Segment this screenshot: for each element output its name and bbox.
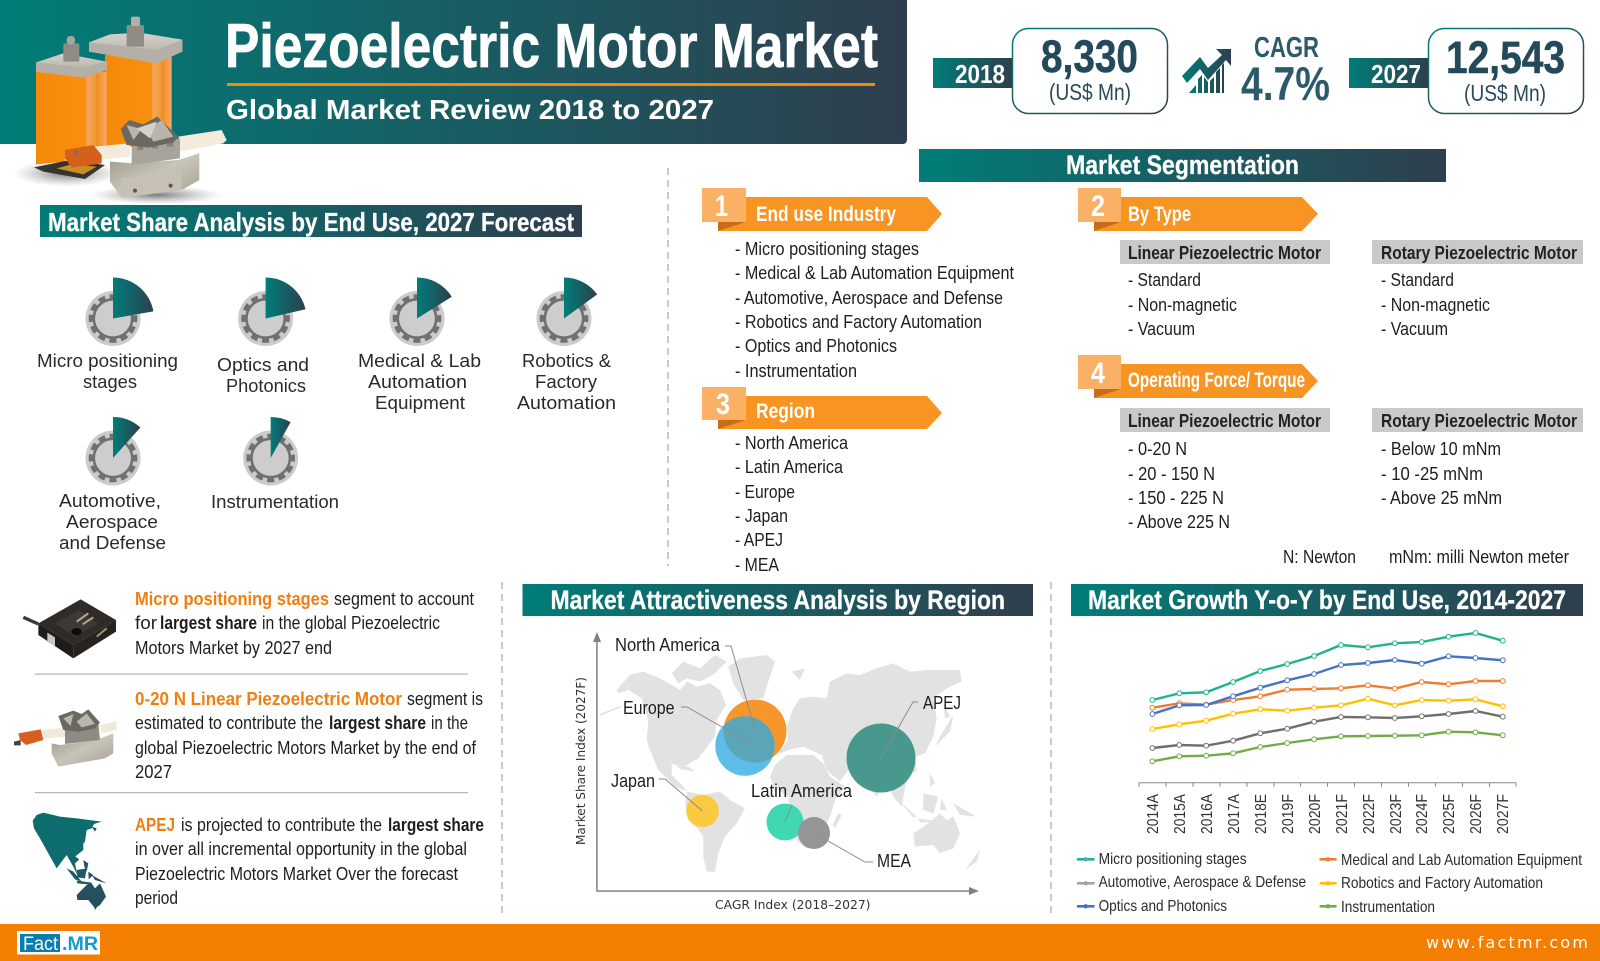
gear: optics and photonics: Photonics	[226, 376, 306, 396]
segment 2: by type: By Type	[1128, 203, 1191, 226]
series: instrumentation	[1150, 729, 1505, 764]
x axis labels: 2021F	[1334, 794, 1351, 834]
list: regions: - Europe	[735, 482, 795, 502]
segment 4: operating force and torque: Operating Force/ Torque	[1128, 369, 1305, 392]
takeaway: micro positioning: largest share	[160, 613, 257, 633]
gear: micro positioning stages	[37, 278, 178, 392]
gear: automotive aerospace and defense: Automotive,	[59, 491, 161, 511]
image: linear piezoelectric motor	[14, 709, 117, 767]
stat: 2027 market value: 2027	[1371, 59, 1421, 89]
gear: robotics and factory automation: Automation	[517, 393, 616, 413]
takeaway: APEJ: largest share	[388, 815, 484, 835]
takeaway: linear motor: 0-20 N Linear Piezoelectric Motor	[135, 689, 402, 709]
column: rotary motor types: - Vacuum	[1381, 319, 1448, 339]
line chart: growth by end use	[1077, 631, 1582, 916]
takeaway: APEJ: Piezoelectric Motors Market Over the forecast	[135, 864, 458, 884]
x axis labels: 2017A	[1226, 794, 1243, 834]
column: linear motor types: - Vacuum	[1128, 319, 1195, 339]
segment 1: end use industry	[702, 188, 1014, 381]
segment 3: region	[702, 387, 942, 575]
legend: Instrumentation	[1341, 899, 1435, 916]
list: end use industries: - Automotive, Aerospace and Defense	[735, 288, 1003, 308]
gear: optics and photonics: Optics and	[217, 355, 309, 375]
stat: 2027 market value: (US$ Mn)	[1464, 80, 1546, 106]
column: rotary motor torque	[1372, 408, 1583, 508]
bubble labels: North America	[615, 635, 721, 655]
bubble labels: APEJ	[923, 693, 961, 713]
segment 1: end use industry: 1	[715, 190, 728, 223]
note: units: mNm: milli Newton meter	[1389, 547, 1569, 567]
list: end use industries: - Robotics and Factory Automation	[735, 312, 982, 332]
series: automotive aerospace and defense	[1150, 709, 1505, 750]
list: end use industries: - Medical & Lab Automation Equipment	[735, 263, 1014, 283]
takeaway: linear motor: estimated to contribute the	[135, 713, 323, 733]
column: linear motor force: - 0-20 N	[1128, 439, 1187, 459]
column: linear motor types: Linear Piezoelectric Motor	[1128, 243, 1321, 263]
takeaway: APEJ: period	[135, 888, 178, 908]
column: linear motor types	[1120, 240, 1330, 339]
gear: medical and lab automation: Automation	[368, 372, 467, 392]
takeaway: micro positioning: Micro positioning stages	[135, 589, 329, 609]
column: linear motor types: - Non-magnetic	[1128, 295, 1237, 315]
gear: automotive aerospace and defense: and Defense	[59, 533, 166, 553]
legend: Micro positioning stages	[1099, 851, 1247, 868]
column: rotary motor torque: - 10 -25 mNm	[1381, 464, 1483, 484]
logo: Fact.MR: Fact	[23, 934, 59, 955]
heading: market segmentation	[919, 149, 1446, 182]
list: regions: - Japan	[735, 506, 788, 526]
stat: 2018 market value	[933, 28, 1168, 114]
column: rotary motor torque: - Above 25 mNm	[1381, 488, 1502, 508]
axis label: CAGR index: CAGR Index (2018–2027)	[715, 898, 870, 912]
stat: 2027 market value	[1349, 28, 1584, 114]
takeaway: micro positioning: segment to account	[334, 589, 474, 609]
segment 1: end use industry: End use Industry	[756, 203, 896, 226]
list: regions	[735, 433, 849, 575]
takeaway: linear motor: segment is	[407, 689, 483, 709]
takeaway: micro positioning: for	[135, 613, 157, 633]
takeaway: linear motor: 2027	[135, 762, 172, 782]
takeaway: micro positioning: in the global Piezoelectric	[262, 613, 440, 633]
segment 4: operating force and torque: 4	[1091, 357, 1105, 390]
website: www.factmr.com	[1426, 933, 1588, 952]
takeaway: linear motor	[135, 689, 483, 782]
bubbles	[686, 700, 916, 849]
stat: 2018 market value: 2018	[955, 59, 1005, 89]
legend	[1077, 851, 1582, 916]
gear: medical and lab automation	[358, 278, 481, 413]
gear: medical and lab automation: Medical & Lab	[358, 351, 481, 371]
bubble labels: Latin America	[751, 781, 853, 801]
gear: instrumentation: Instrumentation	[211, 492, 339, 512]
gear: automotive aerospace and defense: Aerospace	[66, 512, 158, 532]
panel: key takeaways	[14, 589, 484, 910]
heading: market segmentation: Market Segmentation	[1066, 150, 1299, 180]
x axis labels: 2024F	[1414, 794, 1431, 834]
segment 3: region: Region	[756, 400, 815, 423]
heading: market share analysis: Market Share Analysis by End Use, 2027 Forecast	[48, 207, 574, 237]
logo: Fact.MR: .MR	[62, 934, 98, 955]
legend: Robotics and Factory Automation	[1341, 875, 1543, 892]
segment 2: by type: 2	[1091, 190, 1105, 223]
column: linear motor types: - Standard	[1128, 270, 1201, 290]
x axis labels: 2027F	[1495, 794, 1512, 834]
stat: CAGR	[1182, 32, 1330, 110]
column: rotary motor types: - Non-magnetic	[1381, 295, 1490, 315]
stat: CAGR: CAGR	[1254, 32, 1319, 64]
list: regions: - APEJ	[735, 530, 783, 550]
list: end use industries: - Instrumentation	[735, 361, 857, 381]
subtitle: Global Market Review 2018 to 2027	[226, 94, 714, 125]
stat: 2027 market value: 12,543	[1446, 32, 1565, 83]
x axis labels: 2019F	[1280, 794, 1297, 834]
image: micro positioning stage	[23, 599, 116, 658]
takeaway: linear motor: in the	[431, 713, 468, 733]
leader lines	[659, 646, 918, 862]
bubble labels: MEA	[877, 851, 911, 871]
axis label: market share index: Market Share Index (2027F)	[574, 677, 588, 845]
segment 2: by type	[1078, 188, 1583, 339]
series: optics and photonics	[1150, 654, 1505, 716]
list: regions: - Latin America	[735, 457, 844, 477]
column: rotary motor torque: - Below 10 mNm	[1381, 439, 1501, 459]
stat: 2018 market value: (US$ Mn)	[1049, 79, 1131, 105]
stat: CAGR: 4.7%	[1241, 57, 1330, 110]
series: robotics and factory automation	[1150, 696, 1505, 731]
series: medical and lab automation	[1150, 679, 1505, 710]
series: micro positioning stages	[1150, 631, 1505, 702]
legend: Automotive, Aerospace & Defense	[1099, 874, 1306, 891]
x axis	[1139, 783, 1516, 787]
gear: automotive aerospace and defense	[59, 417, 166, 553]
takeaway: micro positioning	[135, 589, 474, 658]
takeaway: APEJ: in over all incremental opportunity in the global	[135, 839, 467, 859]
segment 3: region: 3	[716, 388, 730, 421]
gear: robotics and factory automation: Factory	[535, 372, 597, 392]
takeaway: micro positioning: Motors Market by 2027 end	[135, 638, 332, 658]
bubble labels: Japan	[611, 771, 655, 791]
panel: market share gears	[37, 278, 616, 553]
note: units: N: Newton	[1283, 547, 1356, 567]
logo: Fact.MR	[17, 931, 100, 955]
takeaway: linear motor: global Piezoelectric Motors Market by the end of	[135, 738, 477, 758]
bubble labels: Europe	[623, 698, 674, 718]
x axis labels: 2018E	[1253, 794, 1270, 834]
x axis labels: 2020F	[1307, 794, 1324, 834]
column: linear motor force: Linear Piezoelectric Motor	[1128, 411, 1321, 431]
segment 4: operating force and torque	[1078, 355, 1583, 567]
x axis labels: 2022F	[1361, 794, 1378, 834]
gear: optics and photonics	[217, 278, 309, 396]
list: regions: - MEA	[735, 555, 779, 575]
column: rotary motor types: - Standard	[1381, 270, 1454, 290]
gear: robotics and factory automation	[517, 278, 616, 413]
gear: instrumentation	[211, 417, 339, 512]
x axis labels: 2026F	[1468, 794, 1485, 834]
chart: attractiveness bubble map	[574, 632, 980, 912]
note: units	[1283, 547, 1569, 567]
x axis labels: 2025F	[1441, 794, 1458, 834]
x axis labels: 2016A	[1199, 794, 1216, 834]
column: linear motor force: - Above 225 N	[1128, 512, 1230, 532]
takeaway: APEJ: is projected to contribute the	[181, 815, 382, 835]
gear: robotics and factory automation: Robotics &	[522, 351, 611, 371]
list: end use industries: - Optics and Photonics	[735, 336, 897, 356]
world map background	[600, 655, 980, 872]
vertical dividers	[502, 168, 1051, 918]
gear: micro positioning stages: Micro positioning	[37, 351, 178, 371]
x axis labels	[1145, 794, 1512, 834]
x axis labels: 2014A	[1145, 794, 1162, 834]
column: linear motor force: - 20 - 150 N	[1128, 464, 1215, 484]
gear: medical and lab automation: Equipment	[375, 393, 465, 413]
legend: Optics and Photonics	[1099, 898, 1227, 915]
chart axes	[593, 632, 979, 895]
takeaway: APEJ	[135, 815, 484, 908]
column: rotary motor types	[1372, 240, 1583, 339]
header banner	[0, 0, 907, 144]
column: linear motor force: - 150 - 225 N	[1128, 488, 1224, 508]
takeaway: linear motor: largest share	[329, 713, 426, 733]
list: regions: - North America	[735, 433, 849, 453]
list: end use industries: - Micro positioning stages	[735, 239, 919, 259]
gear: micro positioning stages: stages	[83, 372, 137, 392]
icon: growth arrow	[1182, 49, 1231, 93]
x axis labels: 2015A	[1172, 794, 1189, 834]
bubble labels	[611, 635, 961, 871]
title: Piezoelectric Motor Market	[225, 12, 878, 81]
x axis labels: 2023F	[1388, 794, 1405, 834]
column: linear motor force	[1120, 408, 1330, 532]
footer bar	[0, 924, 1600, 961]
takeaway: APEJ: APEJ	[135, 815, 175, 835]
heading: market attractiveness: Market Attractiveness Analysis by Region	[550, 585, 1005, 615]
list: end use industries	[735, 239, 1014, 381]
image: piezoelectric motors	[13, 17, 227, 204]
stat: 2018 market value: 8,330	[1041, 31, 1138, 82]
icon: asia pacific map	[33, 813, 107, 910]
